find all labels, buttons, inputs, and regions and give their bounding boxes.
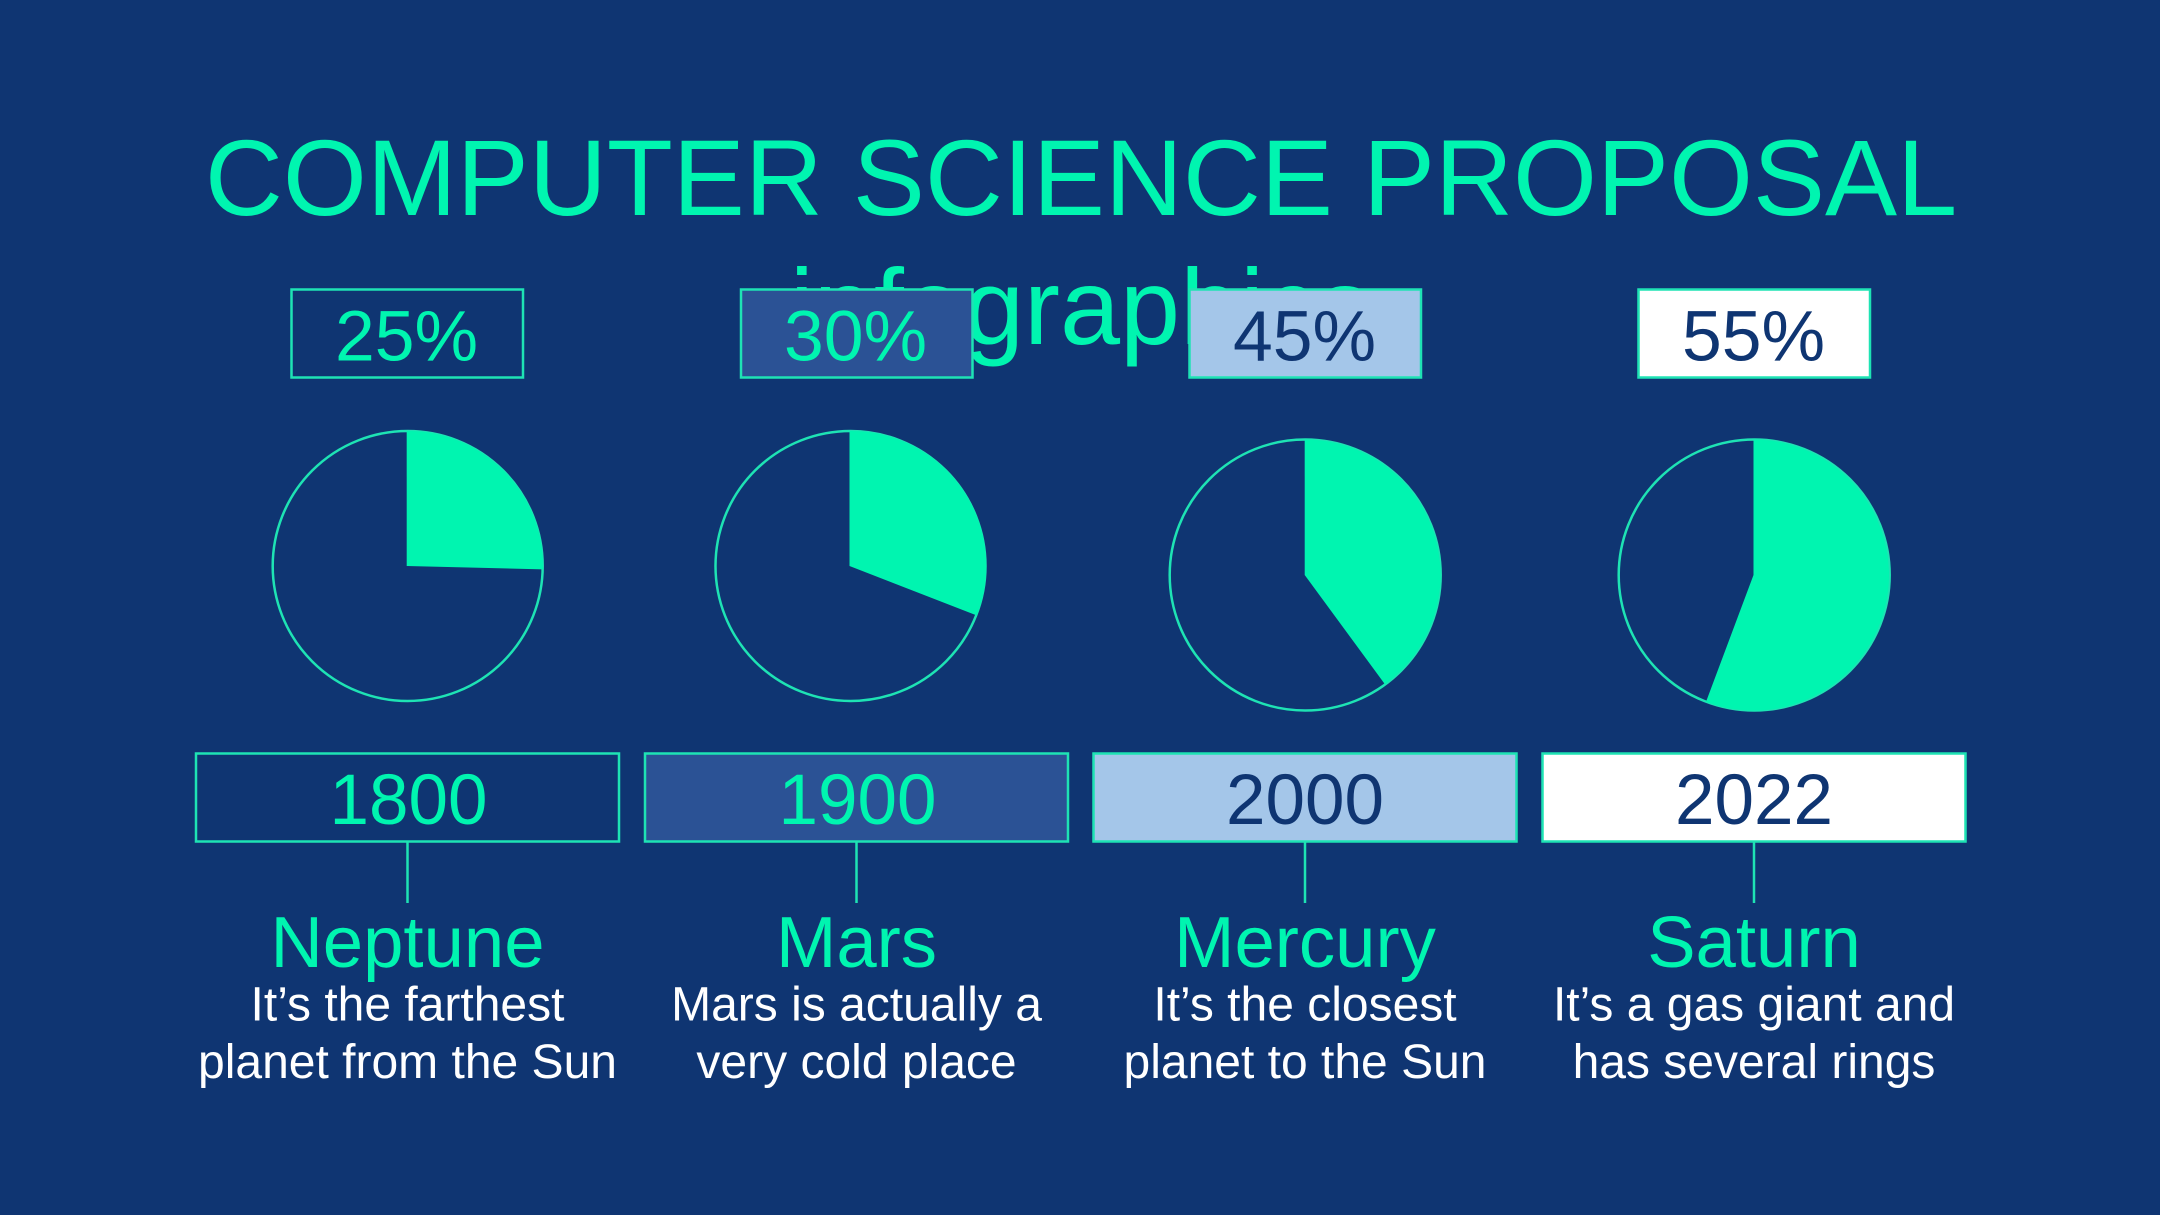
percentage box 55%: 55% — [1682, 296, 1825, 376]
year box 1900: 1900 — [779, 761, 936, 840]
year box 1800: 1800 — [330, 761, 487, 840]
description Mars: very cold place — [696, 1036, 1017, 1089]
description Neptune: It’s the farthest — [251, 978, 564, 1032]
description Mercury: planet to the Sun — [1124, 1036, 1486, 1089]
percentage box 55% — [1638, 290, 1870, 378]
description Saturn: It’s a gas giant and — [1553, 978, 1955, 1032]
description Mercury: It’s the closest — [1153, 978, 1457, 1032]
connector line — [1753, 842, 1755, 903]
description Neptune — [198, 978, 617, 1089]
description Saturn — [1553, 978, 1955, 1089]
title: infographics — [790, 246, 1372, 367]
percentage box 30%: 30% — [784, 296, 927, 376]
pie chart 55% — [1619, 439, 1890, 710]
percentage box 45%: 45% — [1233, 296, 1376, 376]
planet name Mars: Mars — [776, 902, 937, 983]
connector line — [855, 842, 858, 903]
description Mars — [671, 978, 1042, 1089]
year box 2022: 2022 — [1675, 761, 1833, 840]
connector line — [406, 842, 409, 903]
description Mars: Mars is actually a — [671, 978, 1042, 1032]
percentage box 25%: 25% — [335, 296, 478, 376]
description Saturn: has several rings — [1573, 1036, 1935, 1089]
pie chart 45% — [1170, 439, 1441, 710]
description Neptune: planet from the Sun — [198, 1036, 617, 1089]
year box 2000: 2000 — [1226, 761, 1384, 840]
panel: Mars column — [645, 290, 1068, 1089]
title — [205, 117, 1957, 367]
panel: Mercury column — [1094, 290, 1516, 1089]
planet name Mercury: Mercury — [1174, 902, 1437, 983]
percentage box 30% — [741, 290, 972, 378]
planet name Saturn: Saturn — [1647, 902, 1861, 983]
percentage box 25% — [292, 290, 523, 378]
connector line — [1304, 842, 1306, 903]
planet name Neptune: Neptune — [270, 902, 545, 983]
year box 1800 — [196, 754, 619, 842]
year box 1900 — [645, 754, 1068, 842]
year box 2022 — [1542, 754, 1966, 842]
pie chart 30% — [716, 431, 986, 701]
panel: Neptune column — [196, 290, 619, 1089]
percentage box 45% — [1190, 290, 1421, 378]
year box 2000 — [1094, 754, 1516, 842]
panel: Saturn column — [1542, 290, 1966, 1089]
description Mercury — [1124, 978, 1486, 1089]
title: COMPUTER SCIENCE PROPOSAL — [205, 117, 1957, 238]
pie chart 25% — [273, 431, 543, 701]
